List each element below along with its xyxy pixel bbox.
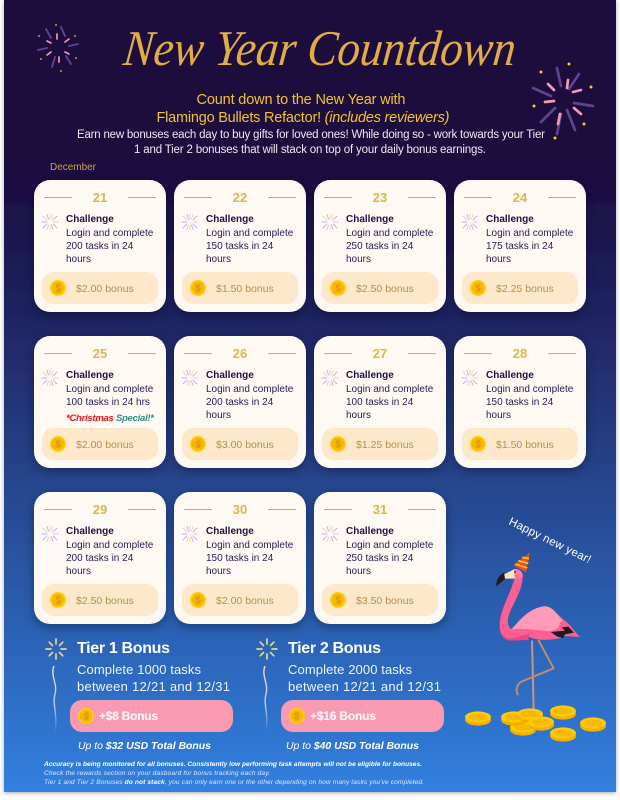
card 23: 250 tasks in 24 [346,241,414,252]
card 22: $1.50 bonus [216,283,274,295]
card 30: $2.00 bonus [216,595,274,607]
card 29: $2.50 bonus [76,595,134,607]
subtitle [156,92,450,126]
card 27: hours [346,410,371,421]
card 30: hours [206,566,231,577]
card 21: $2.00 bonus [76,283,134,295]
card 25: Login and complete [66,384,154,395]
card 26: $3.00 bonus [216,439,274,451]
card 22 [174,180,306,312]
card 23 [314,180,446,312]
card 28: hours [486,410,511,421]
card 29: $ [55,596,61,606]
card 21: $ [55,284,61,294]
title: New Year Countdown [120,20,519,76]
card 22: Challenge [206,214,254,225]
card 24 [454,180,586,312]
panel: tier 1 bonus [46,639,233,752]
card 21 [34,180,166,312]
card 29: hours [66,566,91,577]
subtitle: Flamingo Bullets Refactor! (includes reviewers) [156,110,450,126]
card 27: 100 tasks in 24 [346,397,414,408]
card 31: $ [335,596,341,606]
card 27: Challenge [346,370,394,381]
subtitle: Count down to the New Year with [196,92,406,108]
happy new year caption: Happy new year! [507,516,593,566]
card 28: $ [475,440,481,450]
card 27: 27 [373,346,387,361]
panel: tier 2 bonus: Tier 2 Bonus [288,640,381,657]
card 31: Login and complete [346,540,434,551]
card 25: $ [55,440,61,450]
card 29: 29 [93,502,107,517]
footnotes: Tier 1 and Tier 2 Bonuses do not stack, you can only earn one or the other depending on how many tasks you've completed. [44,779,424,786]
icon: firework right [532,62,593,140]
card 25: $2.00 bonus [76,439,134,451]
card 28: 150 tasks in 24 [486,397,554,408]
card 28 [454,336,586,468]
footnotes: Check the rewards section on your dasboard for bonus tracking each day. [44,770,270,777]
card 25: Challenge [66,370,114,381]
card 24: $ [475,284,481,294]
panel: tier 1 bonus: Complete 1000 tasks [77,662,202,677]
card 23: 23 [373,190,387,205]
card 30: $ [195,596,201,606]
card 27: $ [335,440,341,450]
card 21: 21 [93,190,107,205]
panel: tier 2 bonus: $ [294,712,300,722]
card 31: 31 [373,502,387,517]
card 26: $ [195,440,201,450]
panel: tier 2 bonus: between 12/21 and 12/31 [288,679,441,694]
card 25 [34,336,166,468]
card 23: Login and complete [346,228,434,239]
panel: tier 1 bonus: between 12/21 and 12/31 [77,679,230,694]
icon: firework left [38,24,78,72]
card 21: 200 tasks in 24 [66,241,134,252]
panel: tier 1 bonus: Up to $32 USD Total Bonus [78,740,211,752]
card 23: Challenge [346,214,394,225]
card 22: Login and complete [206,228,294,239]
card 25: 100 tasks in 24 hrs [66,397,150,408]
card 31: $3.50 bonus [356,595,414,607]
footnotes: Accuracy is being monitored for all bonuses. Consistently low performing task attempts will not be eligible for bonuses. [43,761,422,768]
card 31: Challenge [346,526,394,537]
icon: gold coins [465,705,606,742]
card 24: 175 tasks in 24 [486,241,554,252]
card 21: Challenge [66,214,114,225]
card 24: Challenge [486,214,534,225]
card 26: Login and complete [206,384,294,395]
card 25: 25 [93,346,107,361]
panel: tier 2 bonus [257,639,444,752]
card 30: Challenge [206,526,254,537]
card 23: hours [346,254,371,265]
card 30: 150 tasks in 24 [206,553,274,564]
card 29 [34,492,166,624]
card 26: hours [206,410,231,421]
card 21: hours [66,254,91,265]
card 30: Login and complete [206,540,294,551]
card 24: 24 [513,190,528,205]
description [77,129,545,156]
card 24: $2.25 bonus [496,283,554,295]
card 28: 28 [513,346,527,361]
card 31 [314,492,446,624]
panel: tier 2 bonus: +$16 Bonus [310,709,376,723]
description: Earn new bonuses each day to buy gifts for loved ones! While doing so - work towards your Tier [77,129,545,141]
card 28: $1.50 bonus [496,439,554,451]
card 26: 26 [233,346,247,361]
card 26: 200 tasks in 24 [206,397,274,408]
card 26 [174,336,306,468]
card 29: Login and complete [66,540,154,551]
card 30 [174,492,306,624]
card 23: $ [335,284,341,294]
icon: flamingo [496,552,580,709]
card 28: Login and complete [486,384,574,395]
card 28: Challenge [486,370,534,381]
description: 1 and Tier 2 bonuses that will stack on top of your daily bonus earnings. [134,144,486,156]
december label: December [50,162,97,173]
card 24: Login and complete [486,228,574,239]
card 31: hours [346,566,371,577]
card 24: hours [486,254,511,265]
card 26: Challenge [206,370,254,381]
card 27: Login and complete [346,384,434,395]
card 22: hours [206,254,231,265]
card 25: *Christmas Special!* [66,413,155,424]
card 22: $ [195,284,201,294]
panel: tier 2 bonus: Complete 2000 tasks [288,662,412,677]
card 27: $1.25 bonus [356,439,414,451]
card 21: Login and complete [66,228,154,239]
card 31: 250 tasks in 24 [346,553,414,564]
card 29: Challenge [66,526,114,537]
panel: tier 1 bonus: $ [83,712,89,722]
card 23: $2.50 bonus [356,283,414,295]
card 29: 200 tasks in 24 [66,553,134,564]
card 30: 30 [233,502,247,517]
panel: tier 2 bonus: Up to $40 USD Total Bonus [286,740,419,752]
panel: tier 1 bonus: +$8 Bonus [99,709,158,723]
panel: tier 1 bonus: Tier 1 Bonus [77,640,170,657]
footnotes [43,761,424,786]
card 27 [314,336,446,468]
card 22: 150 tasks in 24 [206,241,274,252]
card 22: 22 [233,190,247,205]
